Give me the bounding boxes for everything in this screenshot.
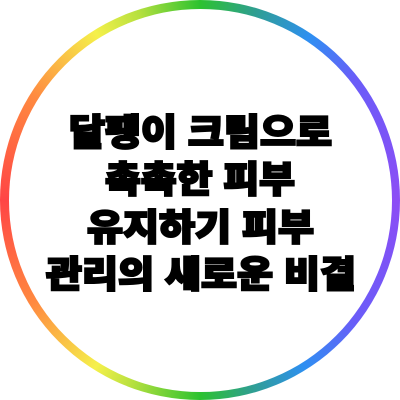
title line 1: 달팽이 크림으로 [69, 112, 332, 153]
title line 3: 유지하기 피부 [87, 207, 314, 248]
title line 4: 관리의 새로운 비결 [46, 254, 356, 295]
title line 2: 촉촉한 피부 [105, 159, 295, 200]
